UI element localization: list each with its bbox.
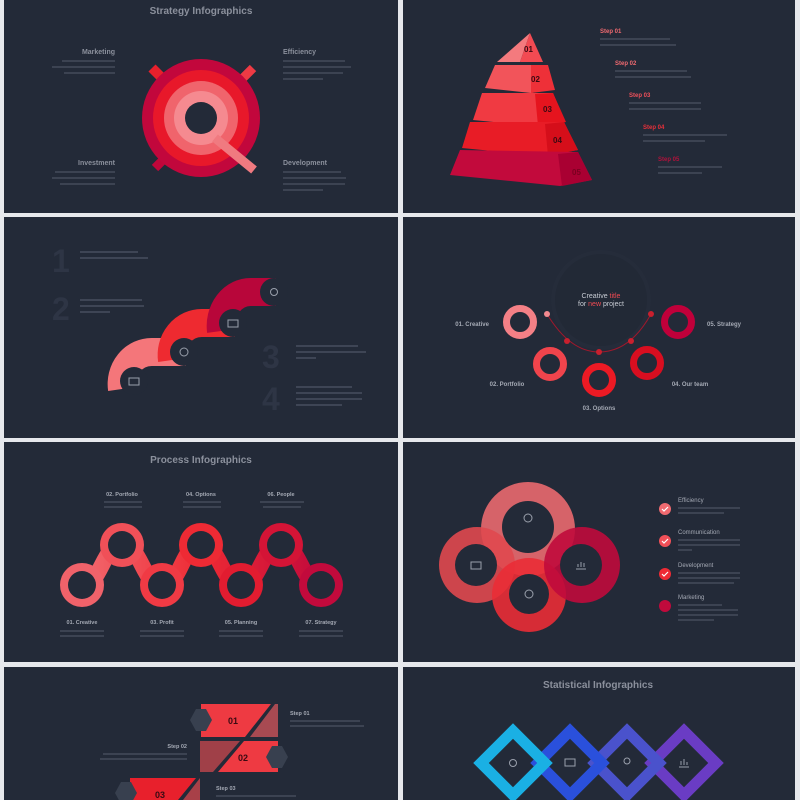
labels: 02. Portfolio <box>490 382 525 388</box>
list: Development <box>678 563 714 569</box>
panel: statistical <box>403 667 795 800</box>
list: Communication <box>678 530 720 536</box>
text: steps: Step 04 <box>643 125 665 131</box>
big numbers: 3 <box>262 339 280 375</box>
step blocks <box>115 704 288 800</box>
text: steps: Step 02 <box>615 61 637 67</box>
step texts: Step 03 <box>216 786 236 792</box>
title: Process Infographics: Process Infographics <box>150 455 252 466</box>
step texts: Step 02 <box>167 744 187 750</box>
labels: 04. Options <box>186 492 216 498</box>
labels: 07. Strategy <box>305 620 338 626</box>
labels: 01. Creative <box>455 322 490 328</box>
text: Efficiency <box>283 49 351 80</box>
step blocks: 02 <box>238 753 248 763</box>
list: Efficiency <box>678 498 704 504</box>
rings <box>506 308 692 394</box>
title: Strategy Infographics: Strategy Infographics <box>150 6 253 17</box>
labels <box>455 322 742 412</box>
text: steps: Step 03 <box>629 93 651 99</box>
labels <box>67 492 338 626</box>
text: Efficiency: Efficiency <box>283 49 316 56</box>
text: Marketing: Marketing <box>82 49 115 56</box>
text: Investment <box>52 160 116 185</box>
labels: 04. Our team <box>672 382 708 388</box>
pyramid chart: 04 <box>553 136 562 145</box>
pyramid chart: 03 <box>543 105 552 114</box>
pyramid chart: 02 <box>531 75 540 84</box>
step blocks: 01 <box>228 716 238 726</box>
text: Investment: Investment <box>78 160 116 167</box>
central circle: Creative title <box>582 293 621 300</box>
diamonds chart <box>481 731 716 795</box>
list: Marketing <box>678 595 704 601</box>
central circle <box>551 250 651 350</box>
panel: overlapping circles <box>403 442 795 662</box>
step texts: Step 01 <box>290 711 310 717</box>
text blocks <box>80 251 366 406</box>
title: Statistical Infographics: Statistical Infographics <box>543 680 653 691</box>
text: Marketing <box>52 49 115 74</box>
panel: pyramid <box>403 0 795 213</box>
pyramid chart: 01 <box>524 45 533 54</box>
target chart <box>142 59 260 177</box>
labels: 03. Options <box>583 406 616 412</box>
panel: s-curve steps <box>4 217 398 438</box>
labels: 06. People <box>267 492 295 498</box>
text: Development: Development <box>283 160 328 167</box>
panel: diagonal steps <box>4 667 398 800</box>
pyramid chart: 05 <box>572 168 581 177</box>
big numbers: 1 <box>52 243 70 279</box>
labels: 05. Strategy <box>707 322 742 328</box>
text: Development <box>283 160 346 191</box>
arc connector <box>547 314 651 352</box>
step texts <box>100 711 364 797</box>
chain chart <box>60 523 343 607</box>
text: steps: Step 05 <box>658 157 680 163</box>
pyramid chart <box>450 33 592 186</box>
central circle: for new project <box>578 301 624 308</box>
panel: strategy <box>4 0 398 213</box>
s-curve chart <box>120 278 288 395</box>
big numbers: 4 <box>262 381 280 417</box>
list <box>659 498 740 621</box>
text: steps <box>600 29 727 174</box>
big numbers: 2 <box>52 291 70 327</box>
labels: 05. Planning <box>225 620 257 626</box>
labels: 03. Profit <box>150 620 174 626</box>
panel: process <box>4 442 398 662</box>
big numbers <box>52 243 280 417</box>
labels: 02. Portfolio <box>106 492 139 498</box>
text: steps: Step 01 <box>600 29 622 35</box>
panel: creative title <box>403 217 795 438</box>
labels: 01. Creative <box>67 620 97 626</box>
circles chart <box>439 482 620 632</box>
step blocks: 03 <box>155 790 165 800</box>
